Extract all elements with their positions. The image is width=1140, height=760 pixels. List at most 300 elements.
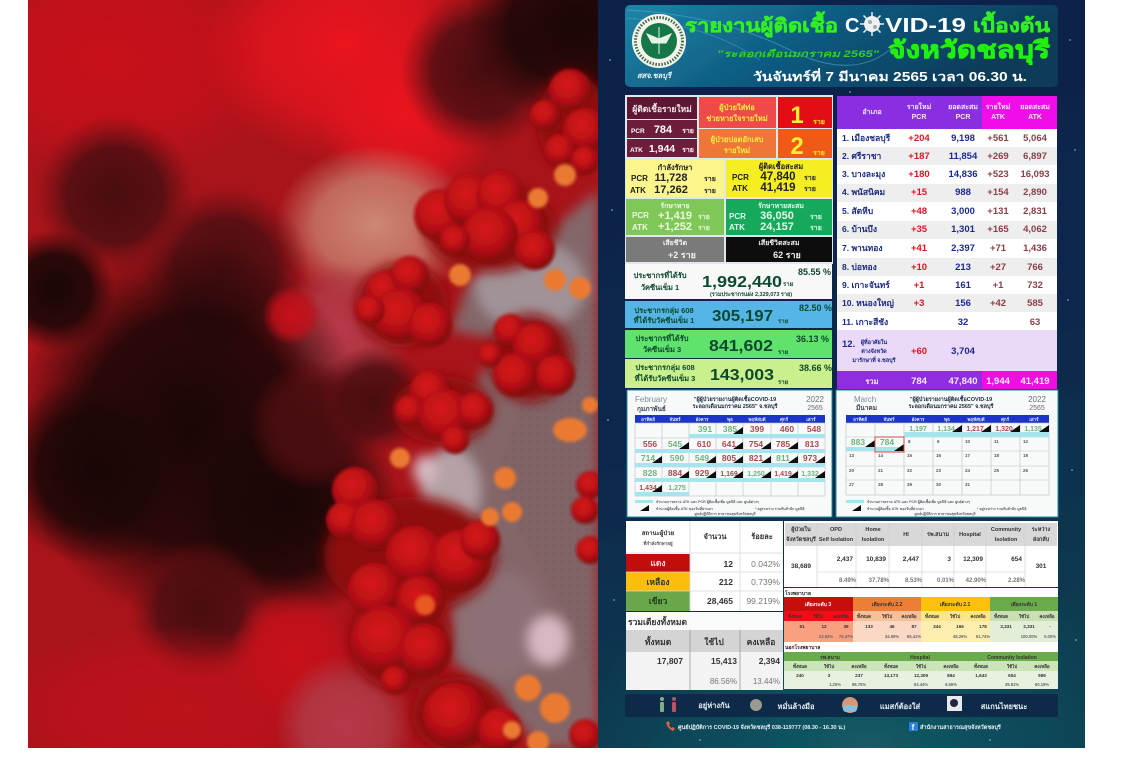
vaccine 608 dose 1: 305,197 <box>712 308 773 325</box>
march grid <box>846 423 1049 495</box>
panel: field hospital table: ทั้งหมด <box>884 662 898 669</box>
panel: field hospital table: 98.75% <box>852 682 866 687</box>
march dates: 14 <box>878 453 884 458</box>
calendar case counts: 545 <box>668 439 682 449</box>
district rows: 11. เกาะสีชัง <box>842 317 888 327</box>
poster background <box>598 0 1085 748</box>
panel: hospital severity table: 178 <box>979 624 987 629</box>
calendar case counts: 590 <box>670 453 684 463</box>
district rows: 12. <box>842 339 855 350</box>
district rows: +204 <box>908 133 930 144</box>
panel: hospital severity table: ทั้งหมด <box>788 612 802 619</box>
district rows: 9,198 <box>951 133 975 144</box>
district rows: +35 <box>911 224 928 235</box>
panel: isolation table: Isolation <box>995 537 1018 543</box>
vaccine dose 1: ราย <box>783 281 794 288</box>
count 2: ราย <box>813 150 825 157</box>
panel: isolation table: 301 <box>1036 563 1047 570</box>
recovered <box>626 199 724 235</box>
march weekday header <box>846 415 1049 423</box>
panel: hospital severity table: คงเหลือ <box>833 613 849 619</box>
panel: field hospital table: ใช้ไป <box>916 663 926 669</box>
district rows: มารักษาที่ จ.ชลบุรี <box>852 356 896 364</box>
district rows: +3 <box>914 298 924 309</box>
panel: march calendar: 2565 <box>1029 405 1045 412</box>
panel: total beds table: คงเหลือ <box>747 637 775 647</box>
panel: hospital severity table: ใช้ไป <box>813 613 823 619</box>
severe patients <box>699 129 776 158</box>
panel: isolation table: 10,839 <box>866 556 886 563</box>
vaccine 608 dose 1 <box>625 301 832 328</box>
header banner: C <box>845 15 859 37</box>
calendar case counts: 1,332 <box>801 471 819 478</box>
province name: จังหวัดชลบุรี <box>888 37 1050 66</box>
district rows: +269 <box>987 151 1009 162</box>
panel: field hospital table: 864 <box>947 673 955 678</box>
march dates: 25 <box>994 468 1000 473</box>
agency label: สสจ.ชลบุรี <box>637 71 673 81</box>
panel: hospital severity table: เตียงระดับ 2.1 <box>940 601 970 608</box>
panel: total beds table: 2,394 <box>759 656 780 666</box>
panel: prevention footer: แมสก์ต้องใส่ <box>880 702 921 711</box>
panel: patient status table: สถานะผู้ป่วย <box>642 529 675 538</box>
march legend: จำนวนการตรวจ ATK และ PCR ผู้ติดเชื้อเพิ่ม มูลนิธิ และ ศูนย์ต่างๆ <box>867 498 970 505</box>
march case counts: 1,134 <box>937 426 955 433</box>
panel: field hospital table: 12,309 <box>914 673 928 678</box>
panel: hospital severity table: ใช้ไป <box>950 613 960 619</box>
district rows: 7. พานทอง <box>842 243 882 253</box>
calendar case counts: 754 <box>749 439 763 449</box>
new PCR: 784 <box>654 124 673 136</box>
march dates: 8 <box>908 439 911 444</box>
panel: hospital severity table: ใช้ไป <box>882 613 892 619</box>
district rows: +131 <box>987 206 1009 217</box>
district rows: 16,093 <box>1020 169 1050 180</box>
district rows: 6,897 <box>1023 151 1047 162</box>
panel: hospital severity table: 100.00% <box>1021 634 1038 639</box>
cumulative cases: ราย <box>804 186 816 193</box>
panel: march calendar: 2022 <box>1028 395 1046 404</box>
panel: prevention footer <box>625 694 1058 717</box>
panel: prevention footer: อยู่ห่างกัน <box>698 701 731 711</box>
panel: isolation table: รพ.สนาม <box>927 531 949 538</box>
cumulative recovered: 24,157 <box>760 221 794 233</box>
calendar case counts: 884 <box>668 468 682 478</box>
march dates: 19 <box>1023 453 1029 458</box>
district rows: 732 <box>1027 280 1043 291</box>
march dates: 23 <box>936 468 942 473</box>
red status row <box>626 554 780 572</box>
yellow status row: 212 <box>719 577 733 587</box>
new PCR: PCR <box>631 128 645 135</box>
count 1: ราย <box>813 119 825 126</box>
vaccine dose 1: 1,992,440 <box>702 274 782 291</box>
march case counts: 1,217 <box>966 426 984 433</box>
march dates: 20 <box>849 468 855 473</box>
recovered: PCR <box>632 211 649 220</box>
panel: field hospital table: 39.81% <box>1005 682 1019 687</box>
calendar case counts: 973 <box>803 453 817 463</box>
calendar case counts: 610 <box>697 439 711 449</box>
march dates: 21 <box>878 468 884 473</box>
contact line <box>666 721 1001 732</box>
panel: isolation table: 2,437 <box>837 556 853 563</box>
calendar case counts: 460 <box>780 424 794 434</box>
cumulative deaths: 62 ราย <box>773 250 801 260</box>
table totals: รวม <box>865 377 879 386</box>
vaccine dose 1: 85.55 % <box>798 267 831 277</box>
march dates: 17 <box>965 453 971 458</box>
district rows: 6. บ้านบึง <box>842 224 877 234</box>
panel: isolation table: OPD <box>830 527 842 533</box>
abroad patients <box>699 97 776 128</box>
march dates: 15 <box>907 453 913 458</box>
calendar legend: จำนวนผู้ติดเชื้อ ATK ของวันที่ผ่านมา <box>656 505 713 512</box>
district rows: +523 <box>987 169 1009 180</box>
vaccine 608 dose 1: ราย <box>778 318 789 325</box>
march dates: 9 <box>937 439 940 444</box>
deaths: +2 ราย <box>668 250 696 260</box>
panel: total beds table <box>626 612 783 690</box>
panel: patient status table: ร้อยละ <box>751 532 773 541</box>
vaccine dose 1: (รวมประชากรแฝง 2,329,073 ราย) <box>710 290 792 298</box>
table totals: 47,840 <box>948 376 978 387</box>
district rows: 9. เกาะจันทร์ <box>842 280 890 290</box>
panel: hospital severity table: 46 <box>889 624 895 629</box>
panel: february calendar: 2022 <box>806 395 824 404</box>
panel: hospital severity table: 48.26% <box>953 634 967 639</box>
panel: field hospital table: ทั้งหมด <box>793 662 807 669</box>
icon: scan app <box>947 696 962 711</box>
date line: วันจันทร์ที่ 7 มีนาคม 2565 เวลา 06.30 น. <box>753 68 1027 84</box>
calendar case counts: 549 <box>695 453 709 463</box>
panel: isolation table: 2.28% <box>1008 578 1026 584</box>
calendar case counts: 1,250 <box>747 471 765 478</box>
abroad patients: ผู้ป่วยใส่ท่อ <box>719 103 755 113</box>
vaccine 608 dose 3: ราย <box>778 379 789 386</box>
panel: field hospital table: 654 <box>1008 673 1016 678</box>
district rows: 161 <box>955 280 972 291</box>
count 1 <box>778 97 832 129</box>
panel: hospital severity table: 34.59% <box>885 634 899 639</box>
recovered: ราย <box>698 214 710 221</box>
table header: ATK <box>1028 114 1042 121</box>
calendar case counts: 821 <box>749 453 763 463</box>
district rows: +60 <box>911 346 927 357</box>
panel: isolation table: 12,309 <box>963 556 983 563</box>
panel: isolation table: ผู้ป่วยใน <box>791 525 811 534</box>
panel: field hospital table: 60.19% <box>1035 682 1049 687</box>
calendar case counts: 805 <box>722 453 736 463</box>
panel: field hospital table: Community Isolation <box>987 655 1037 661</box>
table totals: 41,419 <box>1020 376 1050 387</box>
march dates: 27 <box>849 482 855 487</box>
calendar case counts: 391 <box>698 424 712 434</box>
header banner: เบื้องต้น <box>973 11 1050 37</box>
panel: total beds table: ทั้งหมด <box>645 635 672 647</box>
march weekday header: ศุกร์ <box>1001 416 1010 423</box>
district rows: 1,436 <box>1023 243 1047 254</box>
panel: hospital severity table: 23.53% <box>819 634 833 639</box>
panel: field hospital table: 240 <box>796 673 804 678</box>
march case counts <box>851 426 1042 447</box>
virus spikes: red clusters <box>324 69 607 753</box>
district rows: 5,064 <box>1023 133 1048 144</box>
infographic poster <box>598 0 1085 748</box>
header banner <box>625 5 1058 87</box>
panel: hospital severity table: 87 <box>911 624 917 629</box>
vaccine dose 3: ราย <box>778 349 789 356</box>
district rows: +71 <box>990 243 1007 254</box>
table totals: 1,944 <box>986 376 1011 387</box>
march case counts: 1,320 <box>995 426 1013 433</box>
panel: total beds table: ใช้ไป <box>704 637 724 647</box>
district rows: 156 <box>955 298 971 309</box>
district rows: 2. ศรีราชา <box>842 151 882 161</box>
district rows: 766 <box>1027 262 1043 273</box>
panel: hospital severity table: ใช้ไป <box>1019 613 1029 619</box>
district rows: +10 <box>911 262 927 273</box>
march case counts: 784 <box>880 437 894 447</box>
cumulative cases: ราย <box>804 175 816 182</box>
march cyan bars <box>846 432 1049 451</box>
in treatment: ราย <box>704 188 716 195</box>
calendar case counts: 811 <box>776 453 790 463</box>
cumulative recovered: รักษาหายสะสม <box>758 202 804 210</box>
icon: phone <box>666 721 675 731</box>
red status row: 12 <box>724 559 733 569</box>
calendar case counts: 1,275 <box>668 485 686 492</box>
cumulative deaths: เสียชีวิตสะสม <box>759 239 800 247</box>
in treatment: PCR <box>631 174 648 183</box>
march case counts: 883 <box>851 437 865 447</box>
district rows: +41 <box>911 243 928 254</box>
panel: hospital severity table: 39 <box>843 624 849 629</box>
district rows: +187 <box>908 151 930 162</box>
vaccine 608 dose 1: 82.50 % <box>799 303 832 313</box>
panel: isolation table: ระหว่าง <box>1032 526 1051 533</box>
new cases heading <box>627 97 697 119</box>
count 1: 1 <box>790 102 804 129</box>
panel: hospital severity table: คงเหลือ <box>970 613 986 619</box>
in treatment: 11,728 <box>654 172 688 184</box>
calendar weekday header: อาทิตย์ <box>641 416 655 422</box>
severe patients: รายใหม่ <box>724 146 750 155</box>
calendar case counts: 929 <box>695 468 709 478</box>
district rows: 4,062 <box>1023 224 1047 235</box>
march weekday header: เสาร์ <box>1029 416 1039 422</box>
panel: march calendar: มีนาคม <box>856 404 877 412</box>
panel: isolation table: 8.49% <box>839 578 857 584</box>
district rows: 8. บ่อทอง <box>842 262 877 272</box>
cumulative recovered: 36,050 <box>760 210 794 222</box>
contact line: ศูนย์ปฏิบัติการ COVID-19 จังหวัดชลบุรี 038-119777 (08.30 - 16.30 น.) <box>678 723 845 732</box>
panel: hospital severity table: คงเหลือ <box>901 613 917 619</box>
panel: total beds table: รวมเตียงทั้งหมด <box>628 615 687 627</box>
march dates: 24 <box>965 468 971 473</box>
panel: total beds table: 86.56% <box>710 677 737 686</box>
panel: february calendar: February <box>635 395 667 404</box>
new ATK: 1,944 <box>649 143 675 155</box>
march case counts: 1,135 <box>1024 426 1042 433</box>
panel: isolation table: 38,689 <box>791 563 811 570</box>
panel: patient status table <box>626 521 783 612</box>
panel: field hospital table: Hospital <box>910 655 930 661</box>
district rows: +561 <box>987 133 1009 144</box>
panel: field hospital table: 13,173 <box>884 673 898 678</box>
calendar legend: ศูนย์ปฏิบัติการ สาธารณสุขจังหวัดชลบุรี <box>694 511 756 517</box>
march dates: 28 <box>878 482 884 487</box>
cumulative recovered: ราย <box>810 225 822 232</box>
panel: field hospital table: 3 <box>828 673 831 678</box>
deaths <box>626 237 724 262</box>
cumulative cases: 47,840 <box>760 171 796 183</box>
panel: hospital severity table: ทั้งหมด <box>925 612 939 619</box>
green status row: เขียว <box>649 596 667 606</box>
new PCR <box>627 120 697 138</box>
calendar case counts: 399 <box>750 424 764 434</box>
panel: hospital severity table: 65.41% <box>907 634 921 639</box>
table header: ATK <box>991 114 1005 121</box>
panel: prevention footer: หมั่นล้างมือ <box>778 700 814 711</box>
panel: field hospital table: 93.44% <box>914 682 928 687</box>
panel: isolation table <box>784 521 1058 587</box>
calendar weekday header: พุธ <box>727 417 733 423</box>
icon: hand washing <box>750 699 762 711</box>
vaccine 608 dose 3 <box>625 359 832 388</box>
panel: field hospital table: คงเหลือ <box>1034 663 1050 669</box>
panel: march calendar: March <box>854 395 876 404</box>
march legend <box>846 498 1027 517</box>
district rows: 32 <box>958 317 968 328</box>
calendar case counts: 1,169 <box>720 471 738 478</box>
district rows: +165 <box>987 224 1009 235</box>
table header: ยอดสะสม <box>1020 104 1050 111</box>
green status row: 99.219% <box>746 596 780 606</box>
cumulative cases <box>726 160 832 197</box>
district rows: ผู้ที่อาศัยใน <box>861 338 887 347</box>
panel: hospital severity table: 51 <box>799 624 805 629</box>
count 2: 2 <box>790 133 804 160</box>
panel: field hospital table: รพ.สนาม <box>820 655 840 661</box>
panel: february calendar: "ผู้ผู้ป่วยรายงานผู้ติดเชื้อCOVID-19 <box>694 394 776 404</box>
panel: isolation table: Community <box>991 527 1022 533</box>
district rows: 3. บางละมุง <box>842 169 885 180</box>
vaccine dose 1: วัคซีนเข็ม 1 <box>641 282 679 292</box>
panel: field hospital table <box>784 642 1058 689</box>
recovered: ราย <box>698 225 710 232</box>
severe patients: ผู้ป่วยปอดอักเสบ <box>711 135 764 145</box>
panel: march calendar: "ผู้ผู้ป่วยรายงานผู้ติดเชื้อCOVID-19 <box>910 394 992 404</box>
panel: march calendar <box>836 390 1058 517</box>
district rows: 988 <box>955 187 971 198</box>
table totals: 784 <box>911 376 928 387</box>
new cases heading: ผู้ติดเชื้อรายใหม่ <box>632 102 692 115</box>
panel: february calendar: กุมภาพันธ์ <box>637 405 666 413</box>
panel: field hospital table: 1.25% <box>829 682 841 687</box>
new ATK: ATK <box>630 147 643 154</box>
panel: hospital severity table <box>784 588 1058 642</box>
table header: รายใหม่ <box>907 102 932 111</box>
count 2 <box>778 129 832 160</box>
march legend: * อยู่ระหว่าง รวมกับสำนัก มูลนิธิ <box>977 506 1027 512</box>
panel: field hospital table: ทั้งหมด <box>974 662 988 669</box>
in treatment: 17,262 <box>654 184 688 196</box>
recovered: ATK <box>632 223 648 232</box>
district rows: 1,301 <box>951 224 976 235</box>
vaccine 608 dose 3: 143,003 <box>710 367 774 384</box>
district rows: 213 <box>955 262 971 273</box>
green status row: 28,465 <box>707 596 733 606</box>
vaccine 608 dose 1: ที่ได้รับวัคซีนเข็ม 1 <box>634 314 694 325</box>
cumulative recovered: ราย <box>810 214 822 221</box>
panel: field hospital table: ใช้ไป <box>824 663 834 669</box>
yellow status row: 0.739% <box>751 577 780 587</box>
table header: PCR <box>912 114 926 121</box>
panel: patient status table: จำนวน <box>703 532 727 541</box>
district rows: +180 <box>908 169 930 180</box>
cumulative deaths <box>726 237 832 262</box>
panel: field hospital table: ใช้ไป <box>1007 663 1017 669</box>
district rows: +27 <box>990 262 1006 273</box>
panel: district table <box>837 96 1057 389</box>
green status row <box>626 591 780 611</box>
campaign subtitle: "ระลอกเดือนมกราคม 2565" <box>717 48 880 60</box>
cumulative cases: 41,419 <box>760 182 796 194</box>
recovered: +1,419 <box>658 210 692 222</box>
march triangles <box>865 425 1049 451</box>
icon: facebook <box>909 722 918 732</box>
panel: patient status table: ที่กำลังรักษาอยู่ <box>643 540 673 547</box>
march dates: 11 <box>994 439 999 444</box>
district rows: +1 <box>914 280 925 291</box>
title line 1: รายงานผู้ติดเชื้อ <box>685 11 838 38</box>
in treatment: กำลังรักษา <box>658 163 692 172</box>
table header: ยอดสะสม <box>948 104 978 111</box>
panel: hospital severity table: - <box>1049 624 1051 629</box>
panel: february calendar <box>627 390 832 517</box>
panel: total beds table: 17,807 <box>657 656 683 666</box>
district rows: +154 <box>987 187 1009 198</box>
panel: hospital severity table: เตียงระดับ 1 <box>1011 601 1037 608</box>
march dates: 22 <box>907 468 913 473</box>
panel: isolation table: Isolation <box>862 537 885 543</box>
calendar weekday header: จันทร์ <box>669 416 681 422</box>
calendar case counts: 556 <box>643 439 657 449</box>
calendar weekday header: พฤหัสบดี <box>748 417 766 422</box>
panel: hospital severity table: คงเหลือ <box>1039 613 1055 619</box>
vaccine 608 dose 1: ประชากรกลุ่ม 608 <box>634 306 694 315</box>
calendar legend <box>635 498 805 517</box>
march dates: 16 <box>936 453 942 458</box>
march weekday header: พุธ <box>944 417 950 423</box>
panel: field hospital table: 1,643 <box>975 673 987 678</box>
calendar weekday header <box>635 415 825 423</box>
calendar case counts: 1,434 <box>639 485 657 492</box>
panel: hospital severity table: 3,331 <box>1023 624 1035 629</box>
panel: field hospital table: คงเหลือ <box>851 663 867 669</box>
panel: total beds table: 13.44% <box>753 677 780 686</box>
panel: isolation table: จังหวัดชลบุรี <box>786 536 816 543</box>
panel: isolation table: 37.78% <box>869 578 890 584</box>
panel: hospital severity table: 344 <box>933 624 941 629</box>
district rows: 5. สัตหีบ <box>842 206 873 216</box>
vaccine dose 3: ประชากรที่ได้รับ <box>635 332 689 343</box>
panel: isolation table: 42.90% <box>966 578 987 584</box>
calendar case counts: 641 <box>722 439 736 449</box>
district rows: 14,836 <box>948 169 978 180</box>
march weekday header: จันทร์ <box>883 416 895 422</box>
